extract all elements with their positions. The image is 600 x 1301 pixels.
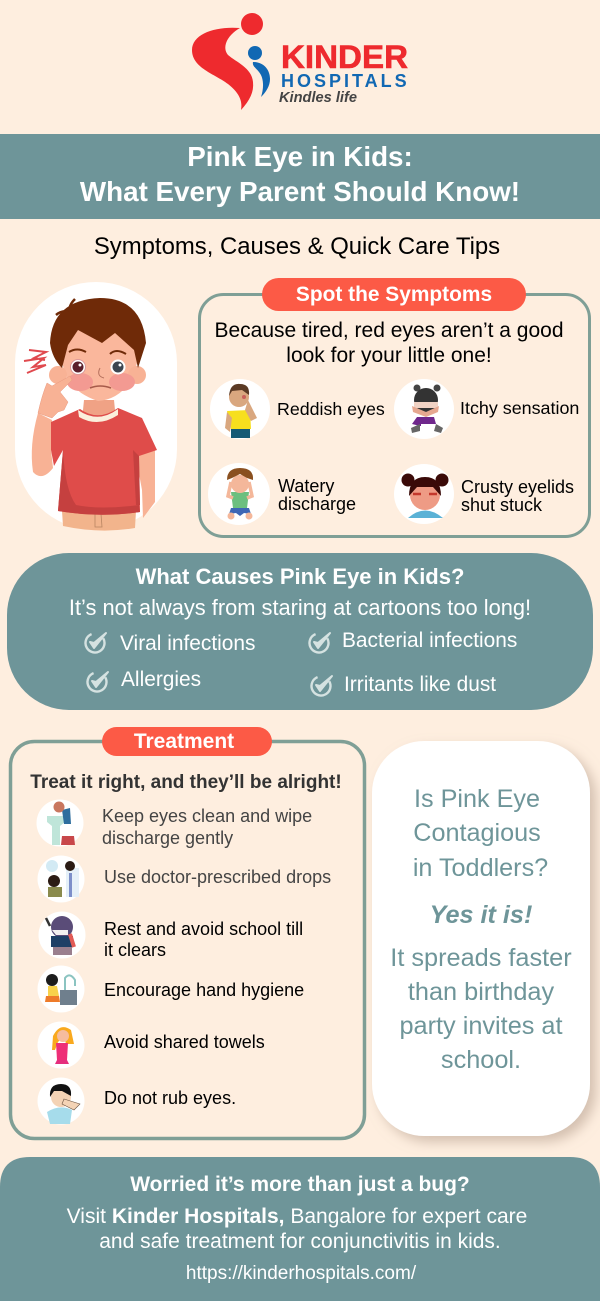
- panel: treatment: [10, 727, 364, 1138]
- symptom: itchy sensation: [394, 379, 579, 439]
- symptom: watery discharge: Watery: [278, 476, 334, 496]
- contagious question: Is Pink Eye: [414, 785, 540, 813]
- title banner: [0, 134, 600, 219]
- tip: keep eyes clean: Keep eyes clean and wipe: [102, 806, 312, 826]
- treatment intro: Treat it right, and they’ll be alright!: [30, 772, 342, 793]
- contagious explanation: It spreads faster: [390, 944, 572, 972]
- contagious explanation: party invites at: [399, 1012, 563, 1040]
- footer body: and safe treatment for conjunctivitis in kids.: [99, 1230, 501, 1253]
- tip: hand hygiene: [38, 966, 304, 1012]
- symptoms heading pill: [262, 278, 526, 311]
- illustration: boy touching red eye: [15, 282, 177, 531]
- tip: rest and avoid school: Rest and avoid school till: [104, 919, 303, 939]
- treatment heading pill: Treatment: [134, 730, 234, 753]
- cause: allergies: [84, 668, 201, 695]
- tip: hand hygiene: Encourage hand hygiene: [104, 980, 304, 1000]
- panel: footer call to action: [0, 1157, 600, 1301]
- cause: allergies: Allergies: [121, 668, 201, 691]
- causes heading: What Causes Pink Eye in Kids?: [136, 564, 464, 589]
- logo: Kindles life: [279, 89, 357, 106]
- title banner: What Every Parent Should Know!: [80, 176, 520, 207]
- cause: viral infections: [82, 630, 255, 656]
- symptom: itchy sensation: Itchy sensation: [460, 398, 579, 418]
- footer body: Visit Kinder Hospitals, Bangalore for expert care: [67, 1205, 527, 1228]
- symptom: reddish eyes: [210, 379, 385, 439]
- tip: avoid shared towels: [38, 1022, 265, 1068]
- panel: spot the symptoms: [200, 278, 590, 536]
- subtitle: Symptoms, Causes & Quick Care Tips: [94, 233, 500, 260]
- symptoms intro: Because tired, red eyes aren’t a good: [214, 319, 564, 342]
- symptom: crusty eyelids: shut stuck: [461, 495, 543, 515]
- footer url: https://kinderhospitals.com/: [186, 1263, 417, 1284]
- symptoms heading pill: Spot the Symptoms: [296, 283, 492, 306]
- cause: bacterial infections: Bacterial infections: [342, 629, 517, 652]
- tip: rest and avoid school: it clears: [104, 940, 166, 960]
- symptom: crusty eyelids: [394, 464, 574, 524]
- contagious question: in Toddlers?: [413, 854, 548, 882]
- treatment heading pill: [102, 727, 272, 756]
- contagious answer: Yes it is!: [430, 901, 532, 929]
- tip: rest and avoid school: [38, 912, 303, 960]
- cause: viral infections: Viral infections: [120, 632, 255, 655]
- symptom: watery discharge: discharge: [278, 494, 356, 514]
- panel: contagious card: [372, 741, 590, 1136]
- contagious explanation: than birthday: [408, 978, 554, 1006]
- symptom: reddish eyes: Reddish eyes: [277, 399, 385, 419]
- contagious question: Contagious: [413, 819, 541, 847]
- causes subheading: It’s not always from staring at cartoons too long!: [69, 595, 531, 620]
- cause: irritants: Irritants like dust: [344, 673, 496, 696]
- tip: do not rub eyes: Do not rub eyes.: [104, 1088, 236, 1108]
- symptom: watery discharge: [208, 463, 356, 525]
- tip: keep eyes clean: discharge gently: [102, 828, 233, 848]
- logo: [192, 13, 410, 110]
- contagious explanation: school.: [441, 1046, 521, 1074]
- symptoms intro: look for your little one!: [286, 344, 492, 367]
- footer heading: Worried it’s more than just a bug?: [130, 1173, 470, 1196]
- title banner: Pink Eye in Kids:: [187, 141, 413, 172]
- tip: doctor-prescribed drops: Use doctor-prescribed drops: [104, 867, 331, 887]
- logo: HOSPITALS: [281, 71, 410, 91]
- tip: keep eyes clean: [36, 800, 312, 848]
- panel: causes: [7, 553, 593, 710]
- symptom: crusty eyelids: Crusty eyelids: [461, 477, 574, 497]
- tip: doctor-prescribed drops: [38, 856, 331, 902]
- tip: avoid shared towels: Avoid shared towels: [104, 1032, 265, 1052]
- tip: do not rub eyes: [38, 1078, 236, 1124]
- logo: KINDER: [281, 39, 408, 75]
